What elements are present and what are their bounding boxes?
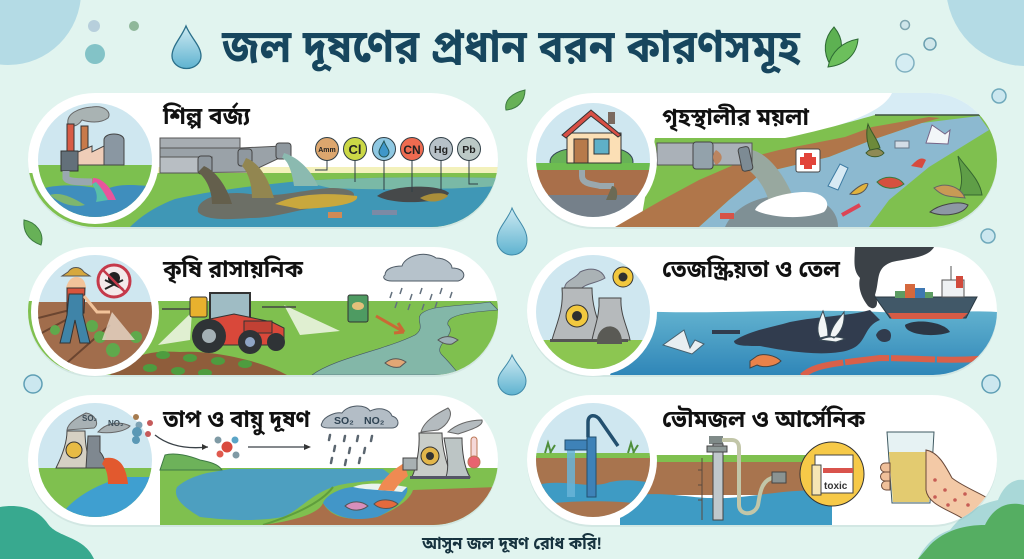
medallion: thermal plant: SO₂ bbox=[82, 414, 98, 423]
glass of water and hand bbox=[880, 432, 990, 520]
thermometer bbox=[468, 437, 480, 468]
runoff arrow bbox=[376, 316, 404, 333]
arsenic badge bbox=[800, 442, 864, 506]
smoke bbox=[854, 245, 935, 308]
panel: agricultural chemicals bbox=[28, 247, 498, 377]
acid rain cloud: NO₂ bbox=[364, 415, 385, 427]
scene: contaminated groundwater bbox=[620, 432, 990, 525]
oil tanker bbox=[875, 266, 977, 319]
floating litter bbox=[720, 124, 982, 219]
medallion: thermal plant bbox=[38, 403, 153, 517]
acid rain cloud: SO₂ bbox=[334, 415, 354, 427]
panel: groundwater and arsenic bbox=[527, 395, 997, 527]
icon: center water drop lower bbox=[498, 355, 526, 395]
cooling towers bbox=[403, 408, 482, 479]
arrows with molecule bbox=[155, 435, 311, 458]
scene: polluted river: Amm bbox=[318, 147, 336, 154]
rain cloud bbox=[384, 254, 464, 310]
heading: household waste: গৃহস্থালীর ময়লা bbox=[662, 103, 810, 132]
fertilizer bag bbox=[348, 295, 368, 322]
panel: radioactivity and oil bbox=[527, 245, 997, 377]
fish bbox=[385, 359, 406, 367]
icon: center water drop upper bbox=[497, 208, 527, 255]
medallion: house bbox=[536, 103, 657, 217]
acid rain cloud bbox=[321, 406, 398, 465]
medallion: nuclear plant bbox=[536, 255, 657, 376]
heading: heat and air pollution: তাপ ও বায়ু দূষণ bbox=[162, 406, 310, 436]
tractor bbox=[162, 293, 296, 354]
scene: polluted river: CN bbox=[403, 143, 421, 157]
fish in warm water bbox=[345, 502, 368, 510]
icon: title leaves bbox=[825, 27, 858, 67]
seagull bbox=[818, 311, 845, 342]
crop rows bbox=[143, 351, 252, 377]
fish in water bbox=[750, 355, 781, 368]
pipe bbox=[657, 142, 753, 172]
gas particles bbox=[132, 414, 153, 444]
medallion: thermal plant: NO₂ bbox=[108, 419, 124, 428]
chemical callouts bbox=[315, 138, 480, 192]
debris bbox=[663, 330, 704, 354]
scene: polluted river bbox=[28, 138, 498, 227]
scene: oil spill at sea bbox=[610, 245, 997, 376]
scene: sewage stream bbox=[615, 93, 997, 227]
monitoring well bbox=[698, 436, 786, 520]
containment boom bbox=[802, 358, 990, 376]
panel: industrial waste bbox=[28, 93, 498, 229]
panel: heat and air pollution bbox=[28, 395, 498, 527]
panel: household waste bbox=[527, 93, 997, 229]
pipes bbox=[160, 138, 318, 204]
heading: agricultural chemicals: কৃষি রাসায়নিক bbox=[162, 255, 303, 284]
medallion: factory bbox=[31, 96, 159, 224]
first aid box bbox=[796, 149, 820, 172]
arsenic badge: toxic bbox=[824, 481, 848, 492]
icon: center leaf bbox=[506, 90, 525, 110]
medallion: farmer spraying bbox=[31, 248, 159, 376]
scene: lake with hot discharge bbox=[155, 406, 498, 525]
title: জল দূষণের প্রধান বরন কারণসমূহ bbox=[221, 20, 801, 74]
heading: groundwater and arsenic: ভৌমজল ও আর্সেনিক bbox=[662, 405, 865, 433]
icon: left leaf bbox=[24, 220, 42, 245]
no-poison sign bbox=[98, 265, 130, 297]
pesticide spray bbox=[158, 305, 340, 345]
scene: polluted river: Pb bbox=[462, 144, 476, 156]
footer slogan: আসুন জল দূষণ রোধ করি! bbox=[421, 533, 602, 554]
medallion: hand pump bbox=[529, 396, 657, 524]
farmer bbox=[60, 268, 110, 343]
scene: polluted river: Hg bbox=[434, 144, 448, 156]
scene: polluted river: Cl bbox=[348, 142, 362, 157]
heading: radioactivity and oil: তেজস্ক্রিয়তা ও তেল bbox=[662, 255, 841, 283]
icon: title water drop bbox=[172, 26, 201, 68]
heading: industrial waste: শিল্প বর্জ্য bbox=[162, 102, 251, 130]
scene: tractor and field bbox=[28, 254, 498, 377]
